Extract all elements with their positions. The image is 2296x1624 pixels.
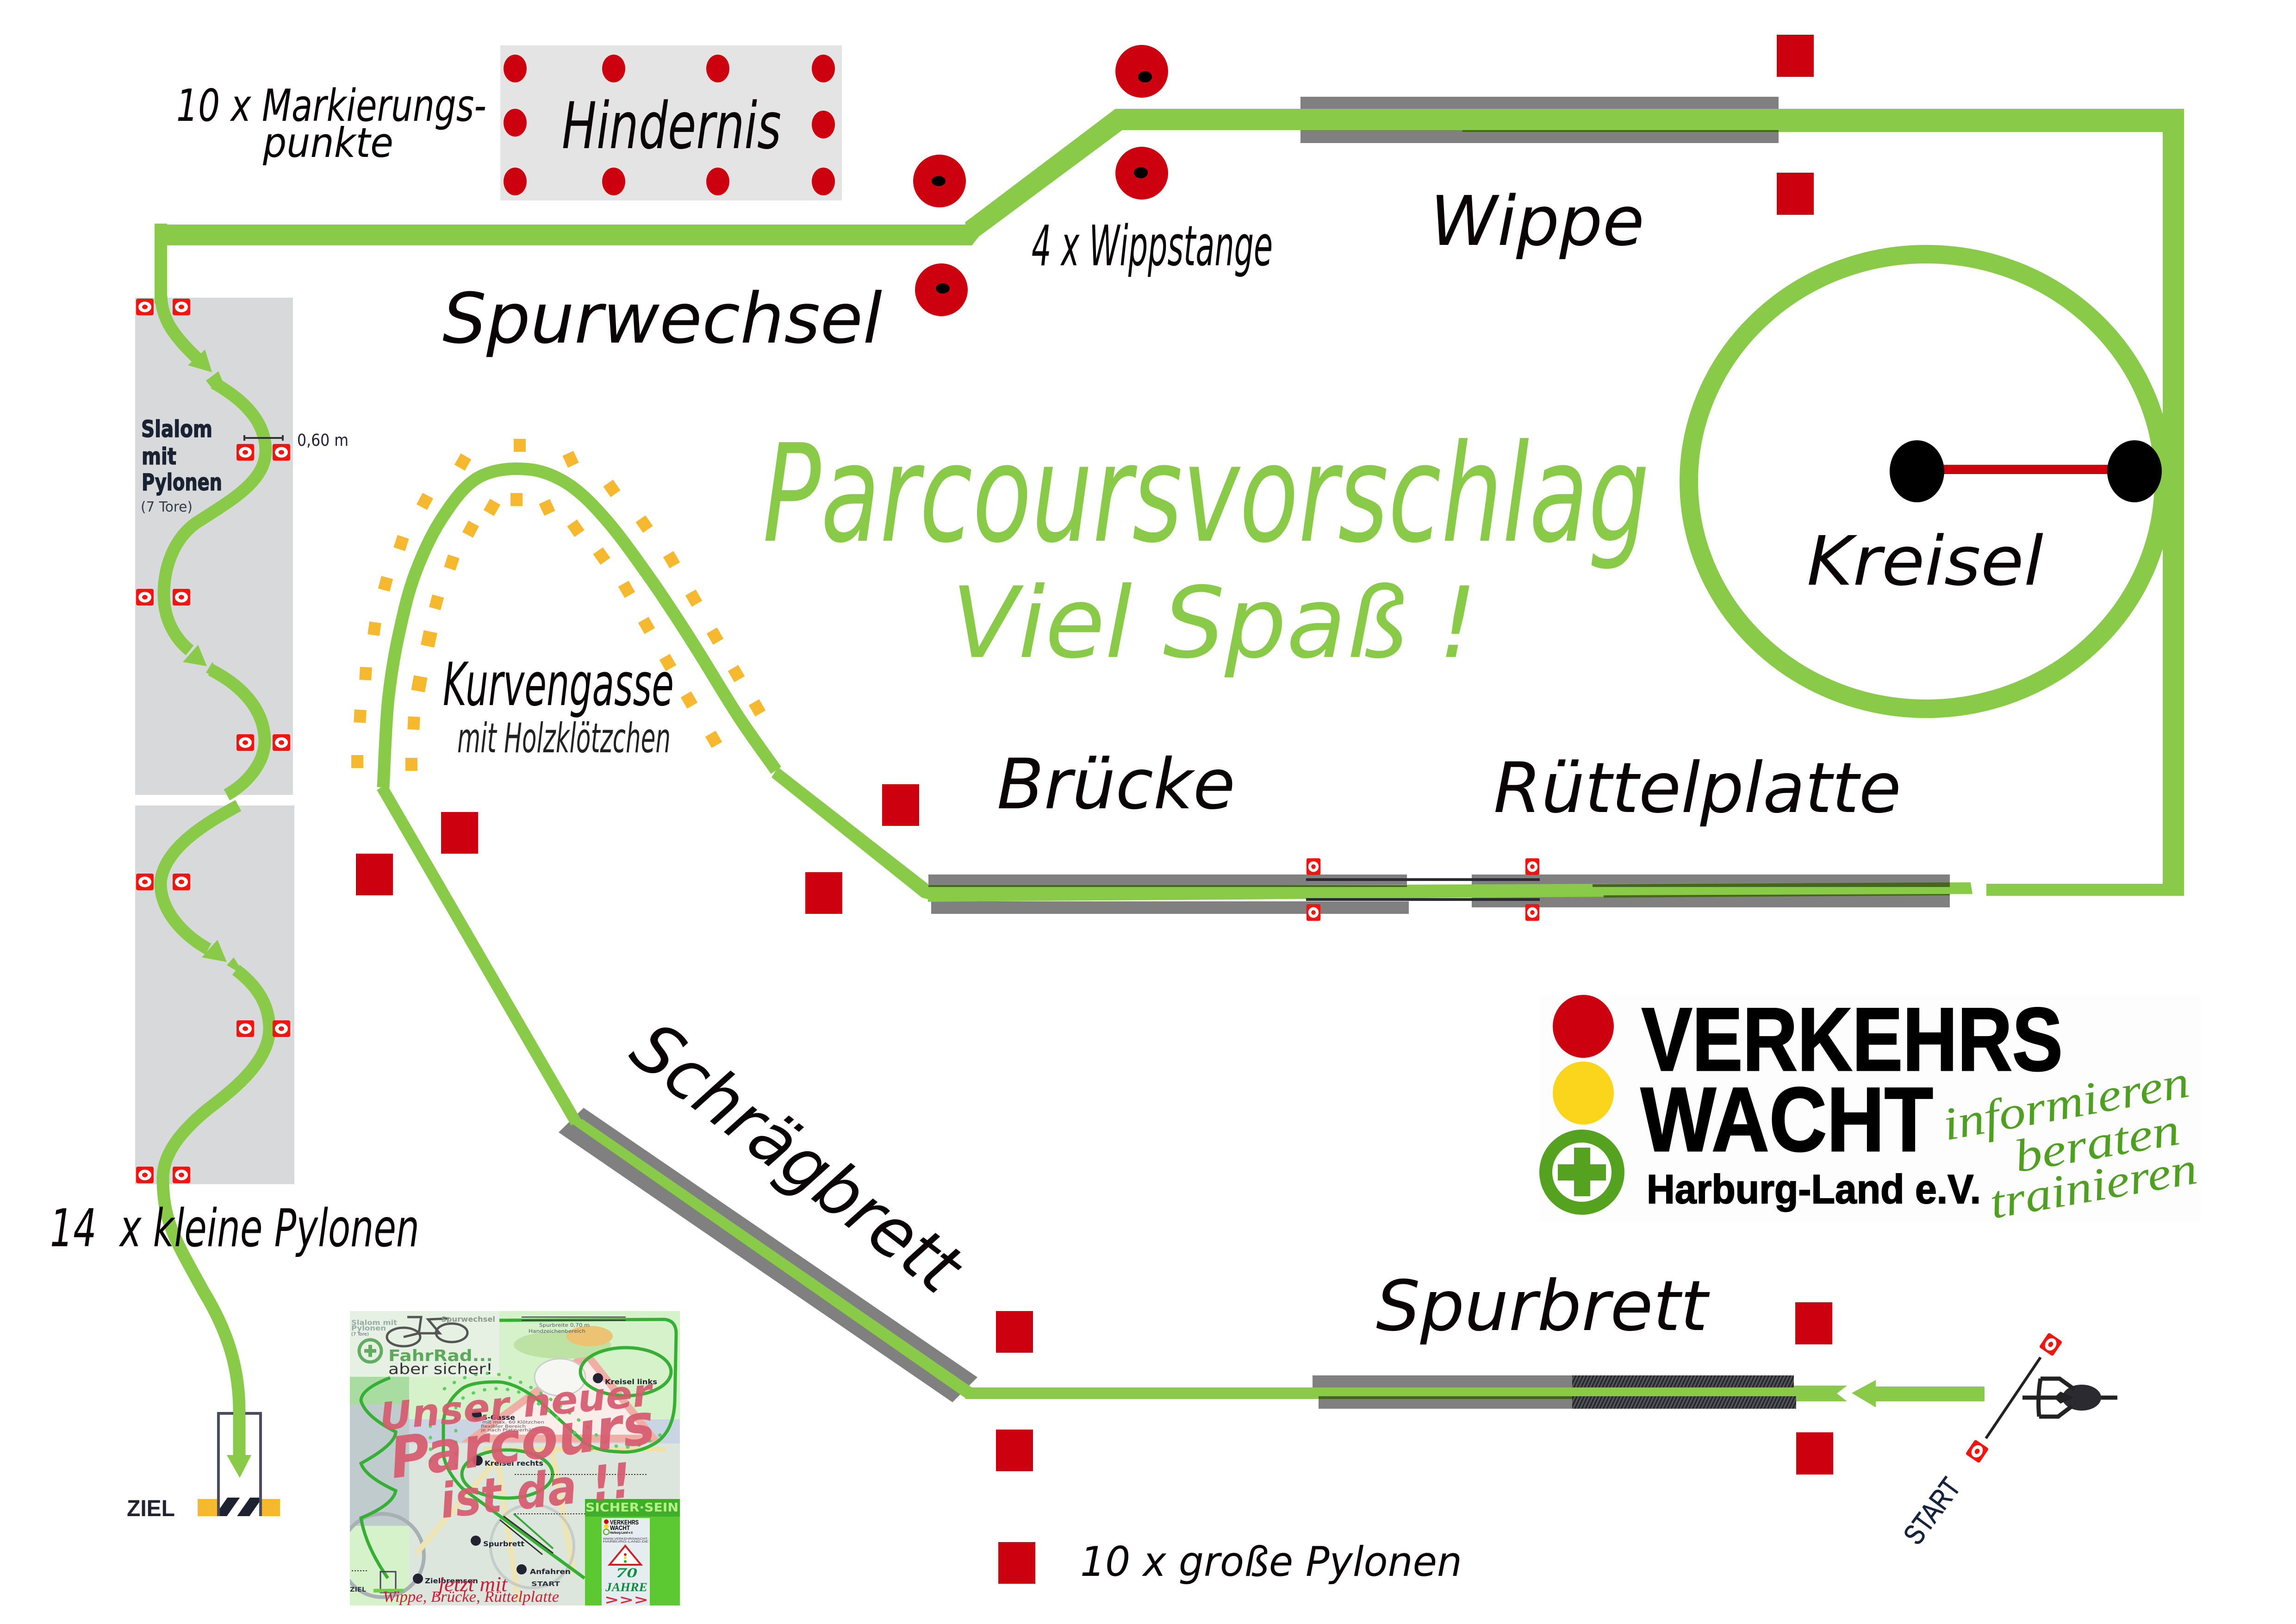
poster small labels: flexibler Bereich [481, 1424, 526, 1429]
slalom label: Slalom [141, 416, 212, 443]
traffic light [1546, 995, 1618, 1208]
poster sticker: JAHRE [605, 1580, 647, 1594]
kreisel [1689, 254, 2164, 709]
panel: slalom [135, 296, 348, 1478]
poster small labels: Pylonen [351, 1324, 386, 1332]
dimension [244, 431, 348, 450]
poster sticker: >>> [604, 1592, 648, 1607]
poster headline: ist da !! [437, 1452, 634, 1530]
poster boards [352, 1317, 648, 1571]
poster small labels: Kreisel rechts [485, 1459, 543, 1468]
logo slogan [1939, 1056, 2201, 1229]
poster sticker [585, 1499, 680, 1607]
logo slogan: beraten [2010, 1103, 2183, 1182]
poster small labels: (7 Tore) [351, 1332, 369, 1337]
poster thumbnail [341, 1311, 680, 1607]
bridge marks [1306, 858, 1540, 921]
poster sticker: WACHT [610, 1524, 630, 1531]
hindernis label: Hindernis [562, 88, 781, 163]
poster headline: Parcours [386, 1391, 659, 1492]
logo wordmark: VERKEHRS [1642, 989, 2063, 1090]
panel: hindernis [500, 45, 842, 200]
poster sticker: 70 [616, 1565, 637, 1580]
poster sticker: HARBURG-LAND.DE [603, 1541, 648, 1543]
slalom label: mit [142, 443, 176, 470]
subtitle: Viel Spaß ! [952, 566, 1477, 680]
label: kurvengasse: Kurvengasse [443, 650, 674, 719]
wippstangen [913, 45, 1168, 316]
poster bike icon [387, 1317, 467, 1346]
markierungspunkte label: 10 x Markierungs- [176, 81, 486, 131]
poster sticker: VERKEHRS [610, 1518, 639, 1526]
slalom cones [136, 299, 290, 1183]
icon: cyclist [2022, 1379, 2117, 1417]
poster small labels: Anfahren [530, 1568, 571, 1576]
logo slogan: informieren [1939, 1056, 2193, 1150]
poster small labels: Spurbreite 0,70 m [539, 1322, 590, 1328]
label: schraegbrett: Schrägbrett [616, 1007, 978, 1311]
logo: verkehrswacht [1539, 989, 2201, 1229]
logo wordmark: Harburg-Land e.V. [1647, 1166, 1981, 1212]
poster small labels: je nach Platzverhältnisse [480, 1428, 550, 1433]
markierungspunkte label: punkte [262, 119, 393, 167]
poster sticker: Harburg-Land e.V. [610, 1531, 633, 1535]
poster footer [384, 1577, 559, 1605]
logo wordmark: WACHT [1641, 1068, 1933, 1170]
label: bruecke: Brücke [997, 744, 1235, 825]
label: ruettelplatte: Rüttelplatte [1493, 748, 1901, 829]
poster small labels: mit max. 60 Klötzchen [482, 1420, 544, 1425]
kurvengasse blocks [351, 439, 765, 771]
label: wippstange: 4 x Wippstange [1032, 214, 1273, 279]
poster cartoon [341, 1326, 666, 1602]
start gate [1898, 1332, 2117, 1550]
slalom label: Pylonen [142, 469, 222, 496]
logo slogan: trainieren [1986, 1142, 2201, 1229]
label: spurbrett: Spurbrett [1376, 1266, 1710, 1347]
shadow edges [928, 130, 1950, 1399]
poster small labels: START [531, 1581, 560, 1588]
poster small labels: Kreisel links [605, 1378, 657, 1386]
kreisel label: Kreisel [1807, 522, 2043, 601]
label: spurwechsel: Spurwechsel [442, 279, 882, 359]
poster small labels: ZIEL [350, 1587, 366, 1593]
logo wordmark [1641, 989, 2063, 1212]
gray boards [559, 97, 1950, 1409]
label: kleine pylonen: 14 x kleine Pylonen [50, 1199, 419, 1259]
markierungspunkte label [176, 81, 486, 167]
title: Parcoursvorschlag [763, 415, 1649, 573]
poster small labels: FahrRad... [388, 1347, 493, 1365]
poster footer: Wippe, Brücke, Rüttelplatte [383, 1588, 559, 1605]
poster sticker: WWW.VERKEHRSWACHT- [603, 1538, 648, 1541]
label: holzkloetzchen: mit Holzklötzchen [457, 714, 671, 762]
poster small labels: Zielbremsen [425, 1577, 478, 1585]
label: grosse pylonen: 10 x große Pylonen [1080, 1538, 1462, 1586]
poster small labels: aber sicher! [388, 1360, 493, 1378]
label: wippe: Wippe [1430, 181, 1644, 261]
poster headline: Unser neuer [378, 1370, 656, 1439]
main track [155, 109, 2184, 1407]
spurbrett hatched section [1572, 1375, 1796, 1409]
dimension: 0,60 m [297, 431, 348, 450]
slalom arrowheads [183, 350, 251, 1478]
large pylons [356, 35, 1833, 1584]
slalom track [161, 296, 269, 1456]
finish label: ZIEL [127, 1495, 175, 1521]
poster sticker: SICHER·SEIN [585, 1501, 678, 1515]
poster footer: jetzt mit [436, 1572, 508, 1596]
finish box [127, 1407, 280, 1521]
slalom gates note: (7 Tore) [141, 499, 193, 515]
marker dots [504, 55, 835, 195]
poster small labels: S-Gasse [482, 1413, 515, 1422]
start label: START [1898, 1472, 1967, 1550]
poster small labels [350, 1315, 657, 1593]
poster small labels: Handzeichenbereich [529, 1328, 585, 1334]
poster course [361, 1319, 676, 1578]
poster small labels: Slalom mit [351, 1318, 397, 1327]
poster small labels: Spurwechsel [441, 1315, 495, 1324]
poster small labels: Spurbrett [483, 1540, 524, 1548]
